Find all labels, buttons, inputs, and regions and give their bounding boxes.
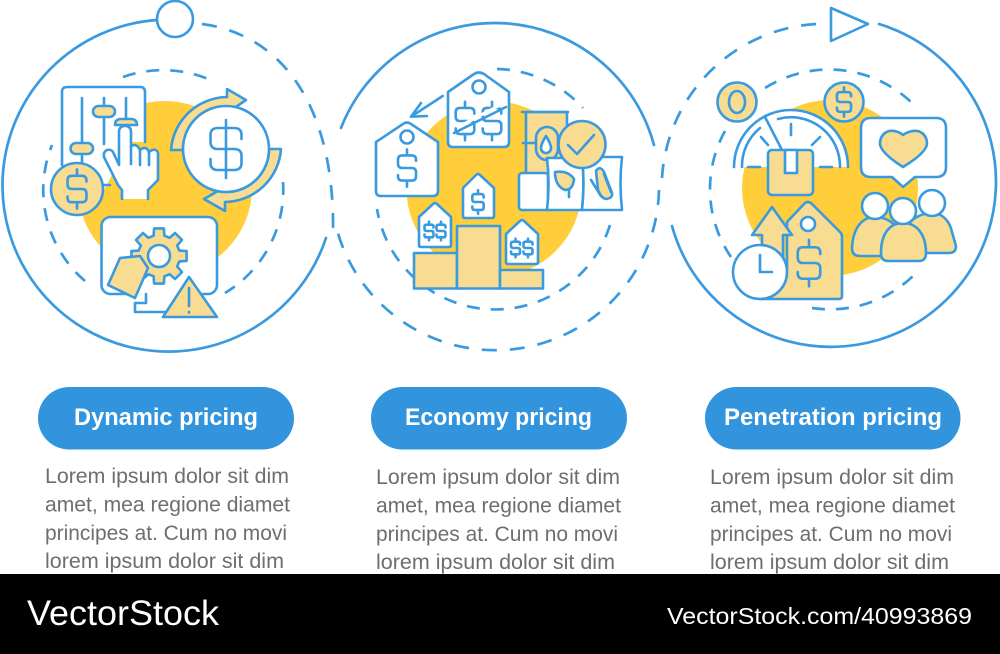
text block: economy pricing: amet, mea regione diamet bbox=[376, 494, 621, 518]
text block: dynamic pricing: amet, mea regione diamet bbox=[45, 494, 290, 516]
icon: centre small tag bbox=[463, 174, 494, 218]
text block: dynamic pricing bbox=[45, 465, 290, 573]
icon: dollar coin bbox=[51, 163, 110, 215]
icon: left small tag bbox=[419, 203, 451, 247]
panel: penetration pricing circle bbox=[662, 8, 996, 347]
icon: price drop arrow bbox=[411, 96, 443, 117]
icon: slider board bbox=[62, 87, 145, 210]
heading pill: dynamic pricing bbox=[38, 387, 294, 450]
text block: economy pricing: principes at. Cum no movi bbox=[376, 523, 618, 546]
text block: dynamic pricing: Lorem ipsum dolor sit dim bbox=[45, 465, 289, 488]
heading pill: economy pricing: Economy pricing bbox=[405, 404, 592, 431]
heading pill: dynamic pricing: Dynamic pricing bbox=[74, 404, 258, 431]
icon: zero coin bbox=[718, 82, 756, 122]
icon: dollar coin bbox=[824, 82, 864, 122]
text block: penetration pricing: Lorem ipsum dolor sit dim bbox=[710, 466, 954, 489]
icon: heart speech bubble bbox=[861, 118, 946, 187]
heading pill: economy pricing bbox=[371, 387, 627, 450]
icon: groceries with check mark bbox=[519, 112, 622, 210]
panel: economy pricing circle bbox=[337, 23, 659, 350]
text block: penetration pricing bbox=[710, 466, 955, 574]
icon: right small tag bbox=[506, 220, 538, 264]
icon: rising price tag with clock bbox=[733, 202, 842, 299]
panel: dynamic pricing circle bbox=[2, 1, 333, 352]
icon: pointing hand bbox=[104, 126, 158, 199]
text block: penetration pricing: principes at. Cum no movi bbox=[710, 523, 952, 546]
text block: economy pricing: lorem ipsum dolor sit dim bbox=[376, 551, 615, 574]
icon: customer group bbox=[852, 190, 956, 261]
icon: speed gauge with box bbox=[734, 110, 848, 195]
text block: dynamic pricing: lorem ipsum dolor sit dim bbox=[45, 550, 284, 573]
heading pill: penetration pricing bbox=[705, 387, 960, 450]
icon: discounted price tag bbox=[376, 122, 438, 196]
heading pill: penetration pricing: Penetration pricing bbox=[724, 404, 942, 431]
footer: watermark bar: VectorStock bbox=[27, 594, 220, 633]
icon: play triangle marker bbox=[831, 8, 868, 41]
icon: rotating dollar arrows bbox=[171, 89, 281, 211]
footer: watermark bar bbox=[0, 574, 1000, 654]
icon: circle marker bbox=[157, 1, 193, 37]
icon: podium bbox=[414, 226, 543, 288]
text block: economy pricing: Lorem ipsum dolor sit dim bbox=[376, 466, 620, 489]
text block: economy pricing bbox=[376, 466, 621, 574]
footer: watermark bar: VectorStock.com/40993869 bbox=[667, 603, 972, 629]
icon: crossed price tag bbox=[448, 72, 509, 147]
text block: penetration pricing: amet, mea regione diamet bbox=[710, 494, 955, 518]
text block: dynamic pricing: principes at. Cum no movi bbox=[45, 522, 287, 545]
icon: monitor with gear, tag and warning bbox=[102, 217, 217, 317]
text block: penetration pricing: lorem ipsum dolor sit dim bbox=[710, 551, 949, 574]
